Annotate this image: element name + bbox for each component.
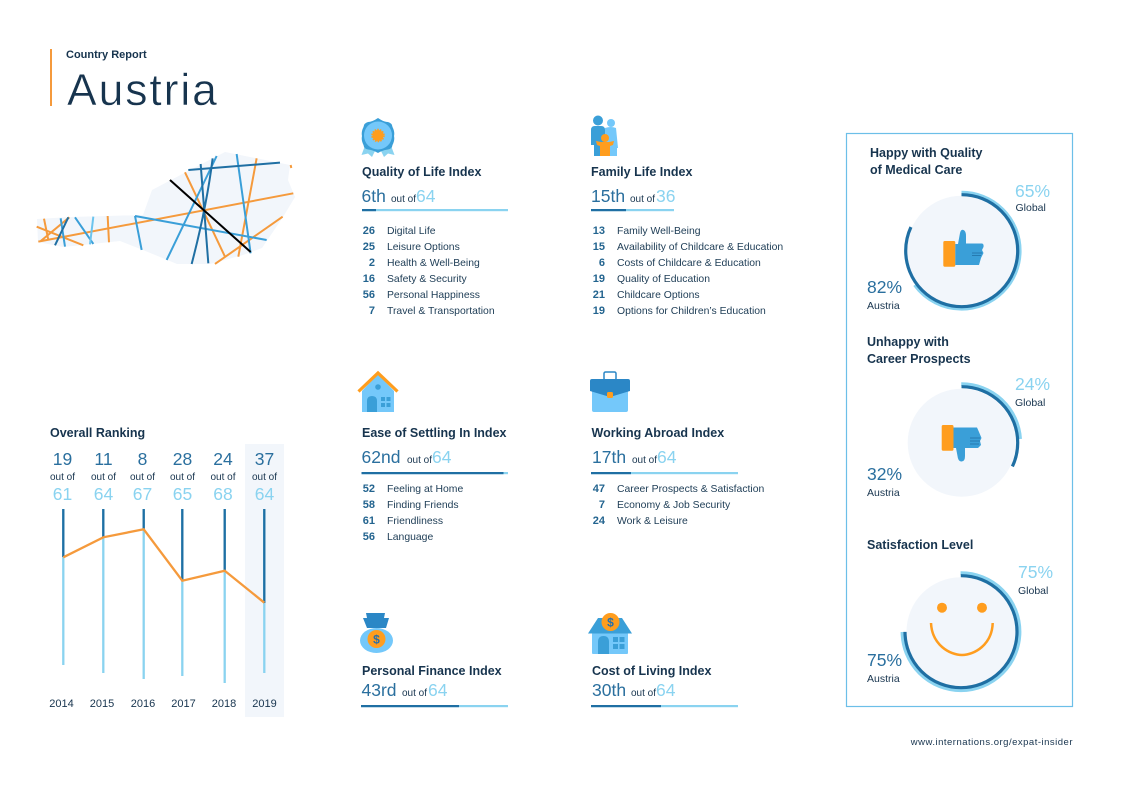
panel: cost of living index: Cost of Living Index (592, 664, 711, 678)
panel: overall ranking (49, 426, 284, 717)
icon: house with coin: $ (607, 616, 614, 630)
icon: family (591, 116, 618, 156)
panel: family life index: Family Life Index (591, 165, 692, 179)
icon: rosette (362, 118, 394, 157)
panel: unhappy with career prospects: Unhappy with (867, 335, 949, 349)
values: Global (1016, 202, 1046, 214)
sub-rankings: 21 (593, 289, 605, 301)
sub-rankings: 19 (593, 305, 605, 317)
ranking numbers: 64 (94, 484, 113, 504)
heading: overall ranking: Overall Ranking (50, 426, 145, 440)
panel: cost of living index (588, 613, 738, 707)
sub-rankings: Options for Children’s Education (617, 306, 766, 317)
sub-rankings: Work & Leisure (617, 516, 688, 527)
panel: personal finance index: Personal Finance Index (362, 664, 502, 678)
year labels: 2015 (90, 698, 114, 710)
map of Austria (37, 152, 295, 264)
rank: out of (630, 194, 655, 205)
ranking numbers: out of (210, 472, 236, 483)
icon: thumb up (943, 230, 984, 267)
sub-rankings: Childcare Options (617, 290, 700, 301)
rank: 15th (591, 186, 625, 206)
ranking numbers: 64 (255, 484, 274, 504)
sub-rankings: Feeling at Home (387, 484, 463, 495)
rank: 64 (416, 186, 436, 206)
panel: happy with medical care: Happy with Quality (870, 146, 983, 160)
line chart (63, 509, 264, 683)
rank bar (591, 472, 738, 474)
year labels: 2014 (49, 698, 74, 710)
rank: 64 (432, 447, 452, 467)
sub-rankings: Digital Life (387, 226, 436, 237)
panel: family life index (591, 116, 783, 317)
icon: house (358, 373, 398, 412)
ranking numbers: 65 (173, 484, 192, 504)
rank: 64 (428, 680, 448, 700)
sub-rankings: Career Prospects & Satisfaction (617, 484, 764, 495)
ranking numbers: 24 (213, 449, 233, 469)
ranking numbers: 68 (213, 484, 233, 504)
ranking numbers: 37 (255, 449, 274, 469)
sub-rankings: 6 (599, 257, 605, 269)
rank (362, 186, 436, 206)
rank bar (361, 705, 508, 707)
panel: unhappy with career prospects (867, 335, 1050, 501)
ranking numbers: 61 (53, 484, 72, 504)
sub-rankings: Economy & Job Security (617, 500, 731, 511)
panel: quality of life index (362, 118, 508, 317)
values: Global (1018, 585, 1048, 597)
ranking numbers: 8 (138, 449, 147, 469)
panel: personal finance index (360, 613, 508, 707)
sub-rankings: Personal Happiness (387, 290, 480, 301)
icon: smiley (931, 603, 993, 655)
sub-rankings: 56 (363, 289, 375, 301)
values (867, 562, 1053, 685)
panel: happy with medical care: of Medical Care (870, 163, 962, 177)
icon: house with coin (588, 613, 632, 654)
rank: 36 (656, 186, 675, 206)
sub-rankings: 15 (593, 241, 605, 253)
sub-rankings: Leisure Options (387, 242, 460, 253)
values: Austria (867, 300, 900, 312)
year labels: 2019 (252, 698, 277, 710)
rank (591, 186, 675, 206)
rank: 64 (657, 447, 677, 467)
sub-rankings: 24 (593, 515, 606, 527)
ranking numbers (50, 449, 277, 504)
year labels: 2016 (131, 698, 155, 710)
ranking numbers: out of (50, 472, 75, 483)
ranking numbers: 67 (133, 484, 152, 504)
panel: satisfaction level (867, 538, 1053, 690)
title block (50, 49, 219, 115)
ranking numbers: out of (170, 472, 195, 483)
rank: out of (407, 455, 432, 466)
donut: medical care (904, 193, 1020, 309)
rank (362, 447, 452, 467)
sub-rankings: Quality of Education (617, 274, 710, 285)
values: 75% (1018, 562, 1053, 582)
values: 24% (1015, 374, 1050, 394)
sub-rankings: 7 (599, 499, 605, 511)
sub-rankings: Safety & Security (387, 274, 468, 285)
rank (362, 680, 448, 700)
rank (592, 447, 677, 467)
rank: out of (391, 194, 416, 205)
icon: briefcase (590, 372, 630, 412)
panel: unhappy with career prospects: Career Prospects (867, 352, 971, 366)
values: 82% (867, 277, 902, 297)
sub-rankings: Health & Well-Being (387, 258, 480, 269)
title block: Country Report (66, 49, 147, 61)
sub-rankings: 56 (363, 531, 375, 543)
rank: out of (402, 688, 427, 699)
sub-rankings: Language (387, 532, 433, 543)
sub-rankings: Availability of Childcare & Education (617, 242, 783, 253)
rank: 17th (592, 447, 626, 467)
ranking numbers: out of (252, 472, 277, 483)
sub-rankings: Finding Friends (387, 500, 459, 511)
year labels: 2018 (212, 698, 236, 710)
year labels (49, 698, 277, 710)
donut: career prospects (903, 384, 1020, 501)
sub-rankings: 7 (369, 305, 375, 317)
ranking numbers: 11 (94, 449, 113, 469)
panel: satisfaction level: Satisfaction Level (867, 538, 973, 552)
sub-rankings: 52 (363, 483, 375, 495)
sub-rankings (593, 483, 764, 527)
rank bar (591, 209, 674, 211)
values: 75% (867, 650, 902, 670)
sub-rankings: 13 (593, 225, 605, 237)
ranking numbers: out of (130, 472, 155, 483)
sub-rankings: Friendliness (387, 516, 443, 527)
sub-rankings (593, 225, 783, 317)
sub-rankings: 19 (593, 273, 605, 285)
sub-rankings (363, 483, 463, 543)
sub-rankings (363, 225, 495, 317)
sub-rankings: 16 (363, 273, 375, 285)
panel: ease of settling in index (358, 373, 508, 543)
rank bar (591, 705, 738, 707)
panel: satisfaction sidebar (846, 134, 1072, 706)
title block: Austria (67, 66, 219, 115)
rank: out of (631, 688, 656, 699)
values: Global (1015, 397, 1045, 409)
sub-rankings: 61 (363, 515, 375, 527)
panel: ease of settling in index: Ease of Settling In Index (362, 426, 507, 440)
rank: out of (632, 455, 657, 466)
sub-rankings: 47 (593, 483, 605, 495)
rank (592, 680, 676, 700)
footer url: www.internations.org/expat-insider (910, 737, 1073, 748)
icon: money bag: $ (373, 632, 380, 646)
panel: quality of life index: Quality of Life Index (362, 165, 482, 179)
sub-rankings: Travel & Transportation (387, 306, 495, 317)
icon: thumb down (942, 425, 982, 462)
year labels: 2017 (171, 698, 196, 710)
sub-rankings: 58 (363, 499, 375, 511)
sub-rankings: Costs of Childcare & Education (617, 258, 761, 269)
rank: 62nd (362, 447, 400, 467)
values: Austria (867, 487, 900, 499)
sub-rankings: 26 (363, 225, 375, 237)
ranking numbers: 28 (173, 449, 192, 469)
ranking numbers: out of (91, 472, 116, 483)
values (867, 181, 1050, 312)
rank: 30th (592, 680, 626, 700)
rank: 43rd (362, 680, 397, 700)
panel: working abroad index: Working Abroad Index (592, 426, 724, 440)
rank: 64 (656, 680, 676, 700)
values: 32% (867, 464, 902, 484)
sub-rankings: Family Well-Being (617, 226, 701, 237)
icon: money bag (360, 613, 393, 653)
panel: happy with medical care (867, 146, 1050, 312)
rank bar (362, 472, 508, 474)
rank: 6th (362, 186, 386, 206)
values: Austria (867, 673, 900, 685)
rank bar (362, 209, 508, 211)
panel: working abroad index (590, 372, 764, 527)
ranking numbers: 19 (53, 449, 72, 469)
values: 65% (1015, 181, 1050, 201)
values (867, 374, 1050, 499)
donut: satisfaction (902, 573, 1020, 690)
sub-rankings: 2 (369, 257, 375, 269)
sub-rankings: 25 (363, 241, 375, 253)
